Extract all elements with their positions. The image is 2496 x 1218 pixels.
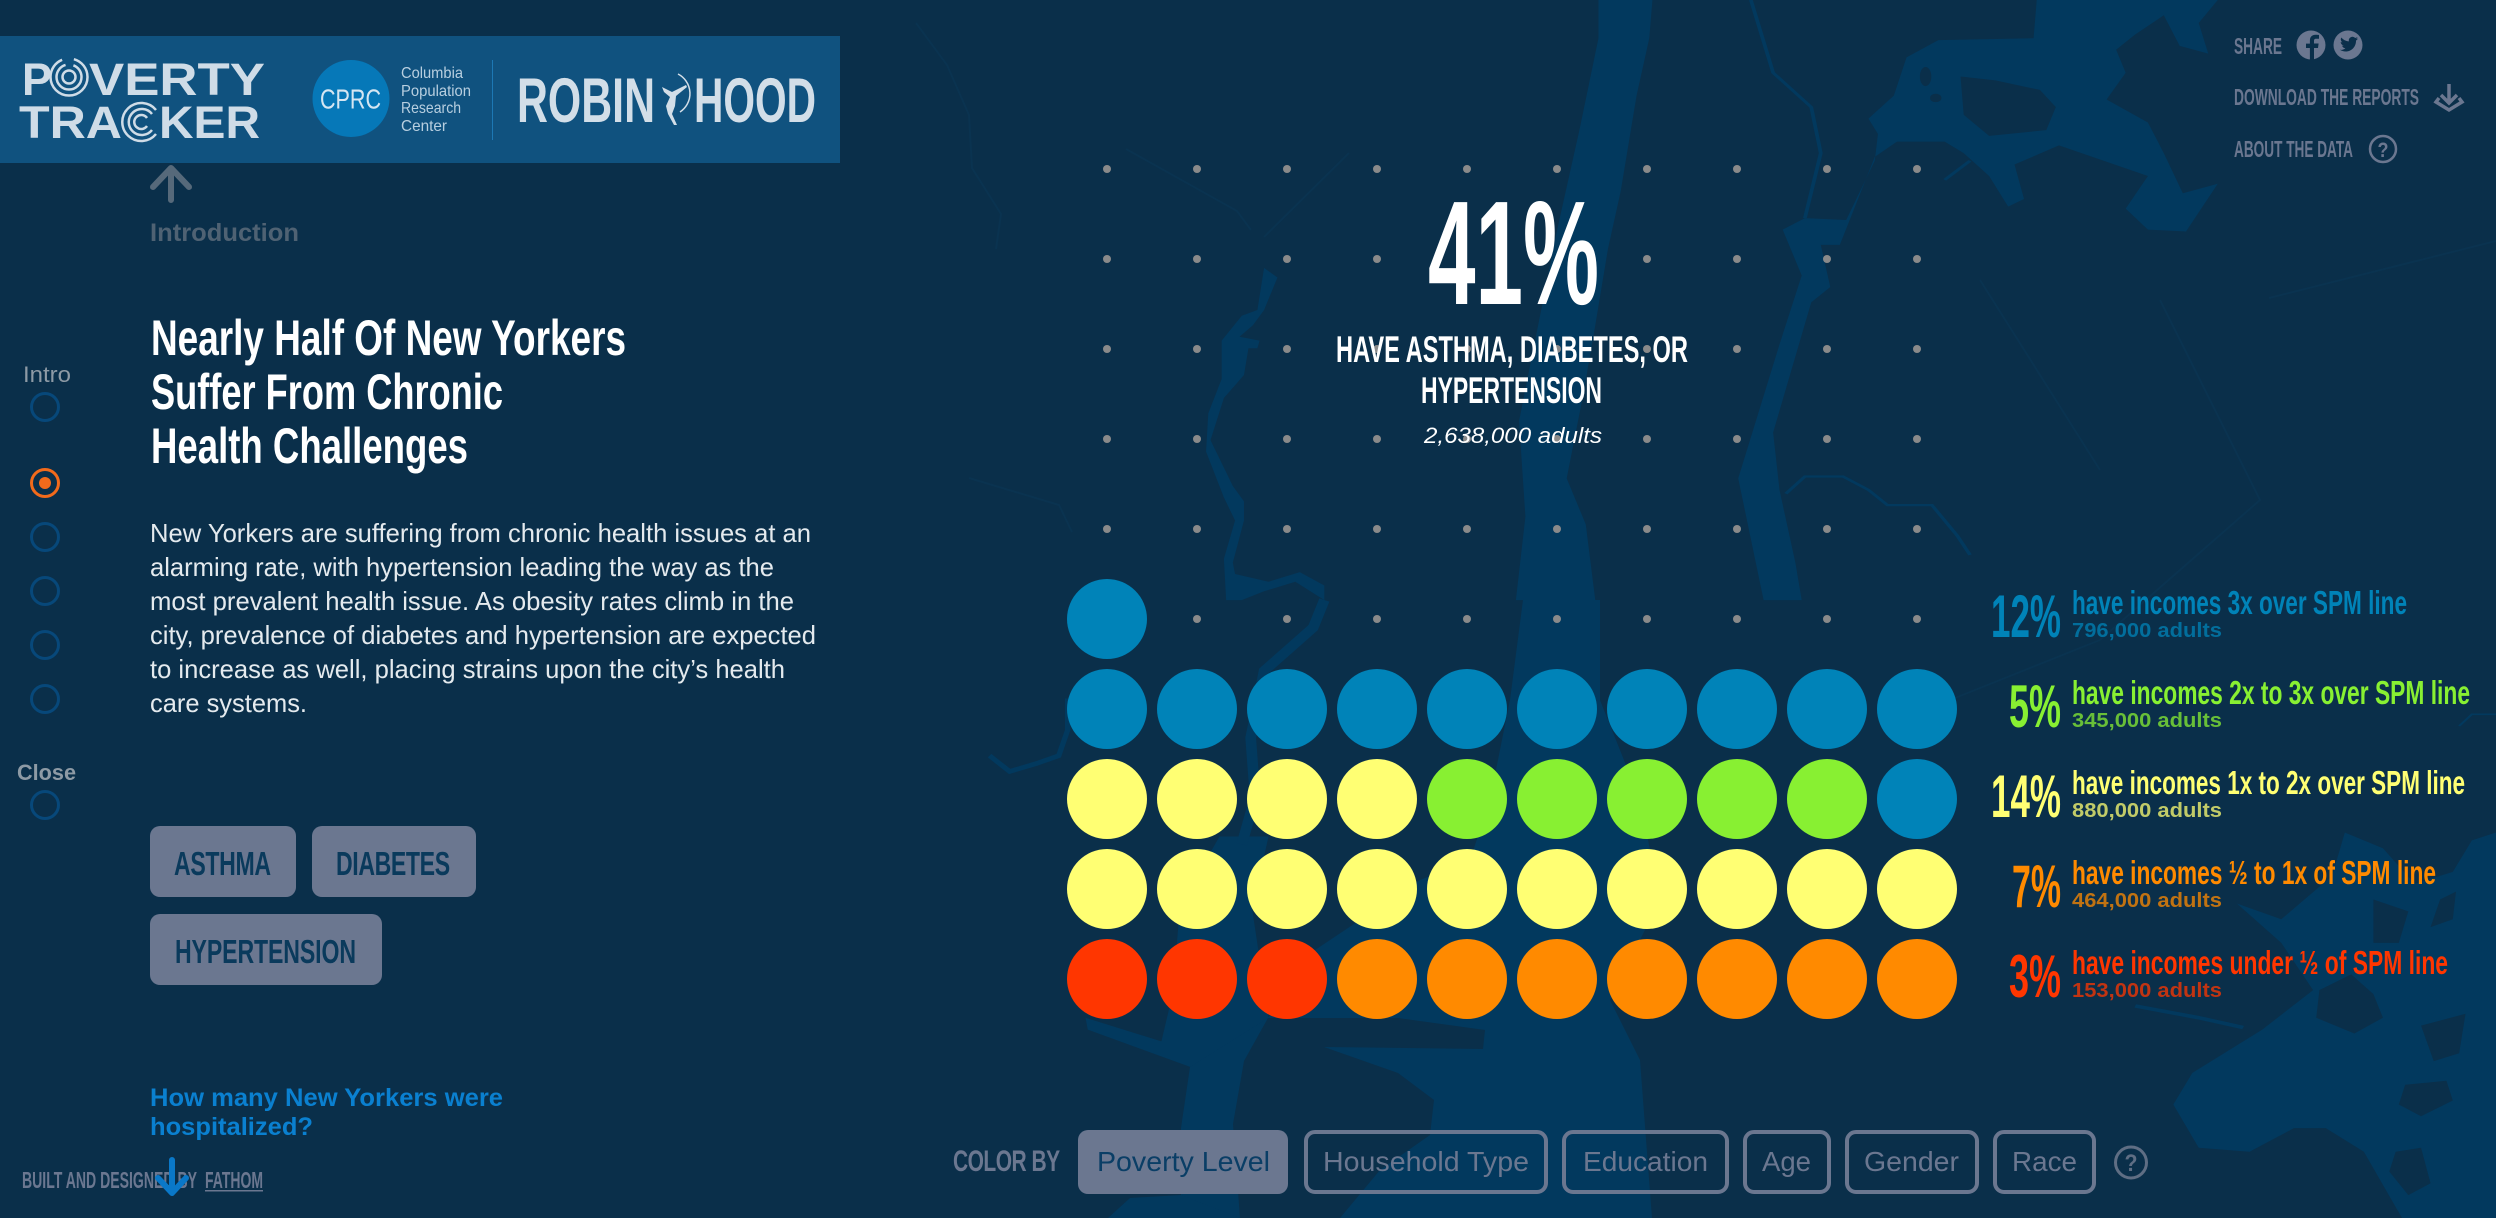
Poverty Tracker logo: TRA <box>19 97 122 148</box>
heading: Suffer From Chronic <box>151 364 503 420</box>
legend: under half of SPM: 3% <box>2009 943 2061 1010</box>
down arrow <box>158 1160 186 1193</box>
heading: Nearly Half Of New Yorkers <box>151 310 626 366</box>
section navigation: Close <box>17 760 76 785</box>
heading <box>151 310 626 474</box>
Robin Hood logo: ROBIN <box>517 66 655 136</box>
about the data link: ABOUT THE DATA <box>2234 136 2353 162</box>
legend: under half of SPM: 153,000 adults <box>2072 980 2222 1002</box>
section navigation <box>17 362 76 818</box>
body paragraph: most prevalent health issue. As obesity rates climb in the <box>150 586 794 616</box>
tab: household type <box>1306 1132 1546 1192</box>
legend: half to 1x of SPM: 464,000 adults <box>2072 890 2222 912</box>
next section question: hospitalized? <box>150 1113 313 1141</box>
tab: household type: Household Type <box>1323 1146 1529 1177</box>
unit chart: people by poverty level <box>1067 579 1957 1019</box>
legend: 2x to 3x over SPM: 5% <box>2009 673 2061 740</box>
row: 1x to 2x SPM <box>1067 759 1957 929</box>
next section question: How many New Yorkers were <box>150 1084 503 1112</box>
next section question <box>150 1084 503 1141</box>
CPRC logo: CPRC <box>320 84 381 114</box>
legend: 1x to 2x over SPM: 880,000 adults <box>2072 800 2222 822</box>
icon: help <box>2116 1147 2146 1178</box>
filter button: asthma: ASTHMA <box>174 846 271 883</box>
color by label: COLOR BY <box>953 1146 1060 1178</box>
filter button: diabetes: DIABETES <box>336 846 450 883</box>
icon: about help: ? <box>2378 139 2388 162</box>
icon: about help <box>2370 136 2396 162</box>
active tab: poverty level: Poverty Level <box>1097 1146 1270 1177</box>
legend: 2x to 3x over SPM <box>2009 673 2470 740</box>
filter button: hypertension: HYPERTENSION <box>175 934 356 971</box>
body paragraph: to increase as well, placing strains upon the city’s health <box>150 654 785 684</box>
CPRC logo <box>312 60 493 140</box>
legend: 1x to 2x over SPM: 14% <box>1991 763 2061 830</box>
Robin Hood logo: HOOD <box>694 66 816 136</box>
top right links <box>2234 30 2462 162</box>
body paragraph: city, prevalence of diabetes and hypertension are expected <box>150 620 816 650</box>
header banner with logos <box>0 36 840 163</box>
headline statistic: 2,638,000 adults <box>1423 423 1602 448</box>
section navigation: Intro <box>23 362 71 387</box>
CPRC logo: Research <box>401 100 461 117</box>
tab: race <box>1995 1132 2094 1192</box>
icon: twitter <box>2334 30 2362 60</box>
dot grid of unfilled positions <box>1103 165 1921 623</box>
headline statistic <box>1336 171 1688 448</box>
CPRC logo: Center <box>401 118 448 135</box>
tab: education <box>1564 1132 1727 1192</box>
icon: help: ? <box>2124 1150 2138 1177</box>
Robin Hood logo <box>517 66 816 136</box>
headline statistic: 41% <box>1428 171 1599 336</box>
up arrow <box>153 168 189 200</box>
icon: facebook <box>2296 30 2326 60</box>
legend: under half of SPM <box>2009 943 2448 1010</box>
Poverty Tracker logo: VERTY <box>89 54 265 105</box>
body paragraph: alarming rate, with hypertension leading the way as the <box>150 552 774 582</box>
background map of New York waterways <box>916 0 2496 1218</box>
active tab: poverty level <box>1078 1130 1288 1194</box>
legend: 2x to 3x over SPM: 345,000 adults <box>2072 710 2222 732</box>
headline statistic: HAVE ASTHMA, DIABETES, OR <box>1336 329 1688 370</box>
Poverty Tracker logo: KER <box>159 97 260 148</box>
body paragraph: New Yorkers are suffering from chronic health issues at an <box>150 518 811 548</box>
body paragraph <box>150 518 816 718</box>
headline statistic: HYPERTENSION <box>1421 370 1602 411</box>
filter button: asthma <box>150 826 296 897</box>
CPRC logo: Columbia <box>401 65 463 82</box>
tab: age <box>1745 1132 1829 1192</box>
filter button: diabetes <box>312 826 476 897</box>
color by control bar <box>953 1130 2146 1194</box>
tab: gender: Gender <box>1864 1146 1959 1177</box>
tab: education: Education <box>1583 1146 1708 1177</box>
credit line: BUILT AND DESIGNED BY <box>22 1167 197 1193</box>
filter button: hypertension <box>150 914 382 985</box>
row: above 3x SPM <box>1067 579 1957 839</box>
legend: 3x over SPM <box>1991 583 2407 650</box>
tab: gender <box>1847 1132 1977 1192</box>
tab: race: Race <box>2012 1146 2077 1177</box>
tab: age: Age <box>1762 1146 1811 1177</box>
CPRC logo: Population <box>401 83 471 100</box>
row: 2x to 3x SPM <box>1427 759 1867 839</box>
heading: Health Challenges <box>151 418 468 474</box>
legend: 1x to 2x over SPM <box>1991 763 2465 830</box>
legend: half to 1x of SPM: 7% <box>2012 853 2061 920</box>
icon: download <box>2436 84 2462 110</box>
legend: 3x over SPM: 12% <box>1991 583 2061 650</box>
previous section label: Introduction <box>150 219 299 247</box>
credit line: FATHOM <box>205 1167 263 1193</box>
Poverty Tracker logo: P <box>22 54 52 105</box>
Poverty Tracker logo <box>19 54 265 148</box>
body paragraph: care systems. <box>150 688 307 718</box>
legend: 3x over SPM: 796,000 adults <box>2072 620 2222 642</box>
row: half to 1x SPM <box>1337 939 1957 1019</box>
share link: SHARE <box>2234 33 2282 59</box>
row: under half SPM <box>1067 939 1327 1019</box>
legend: half to 1x of SPM <box>2012 853 2436 920</box>
